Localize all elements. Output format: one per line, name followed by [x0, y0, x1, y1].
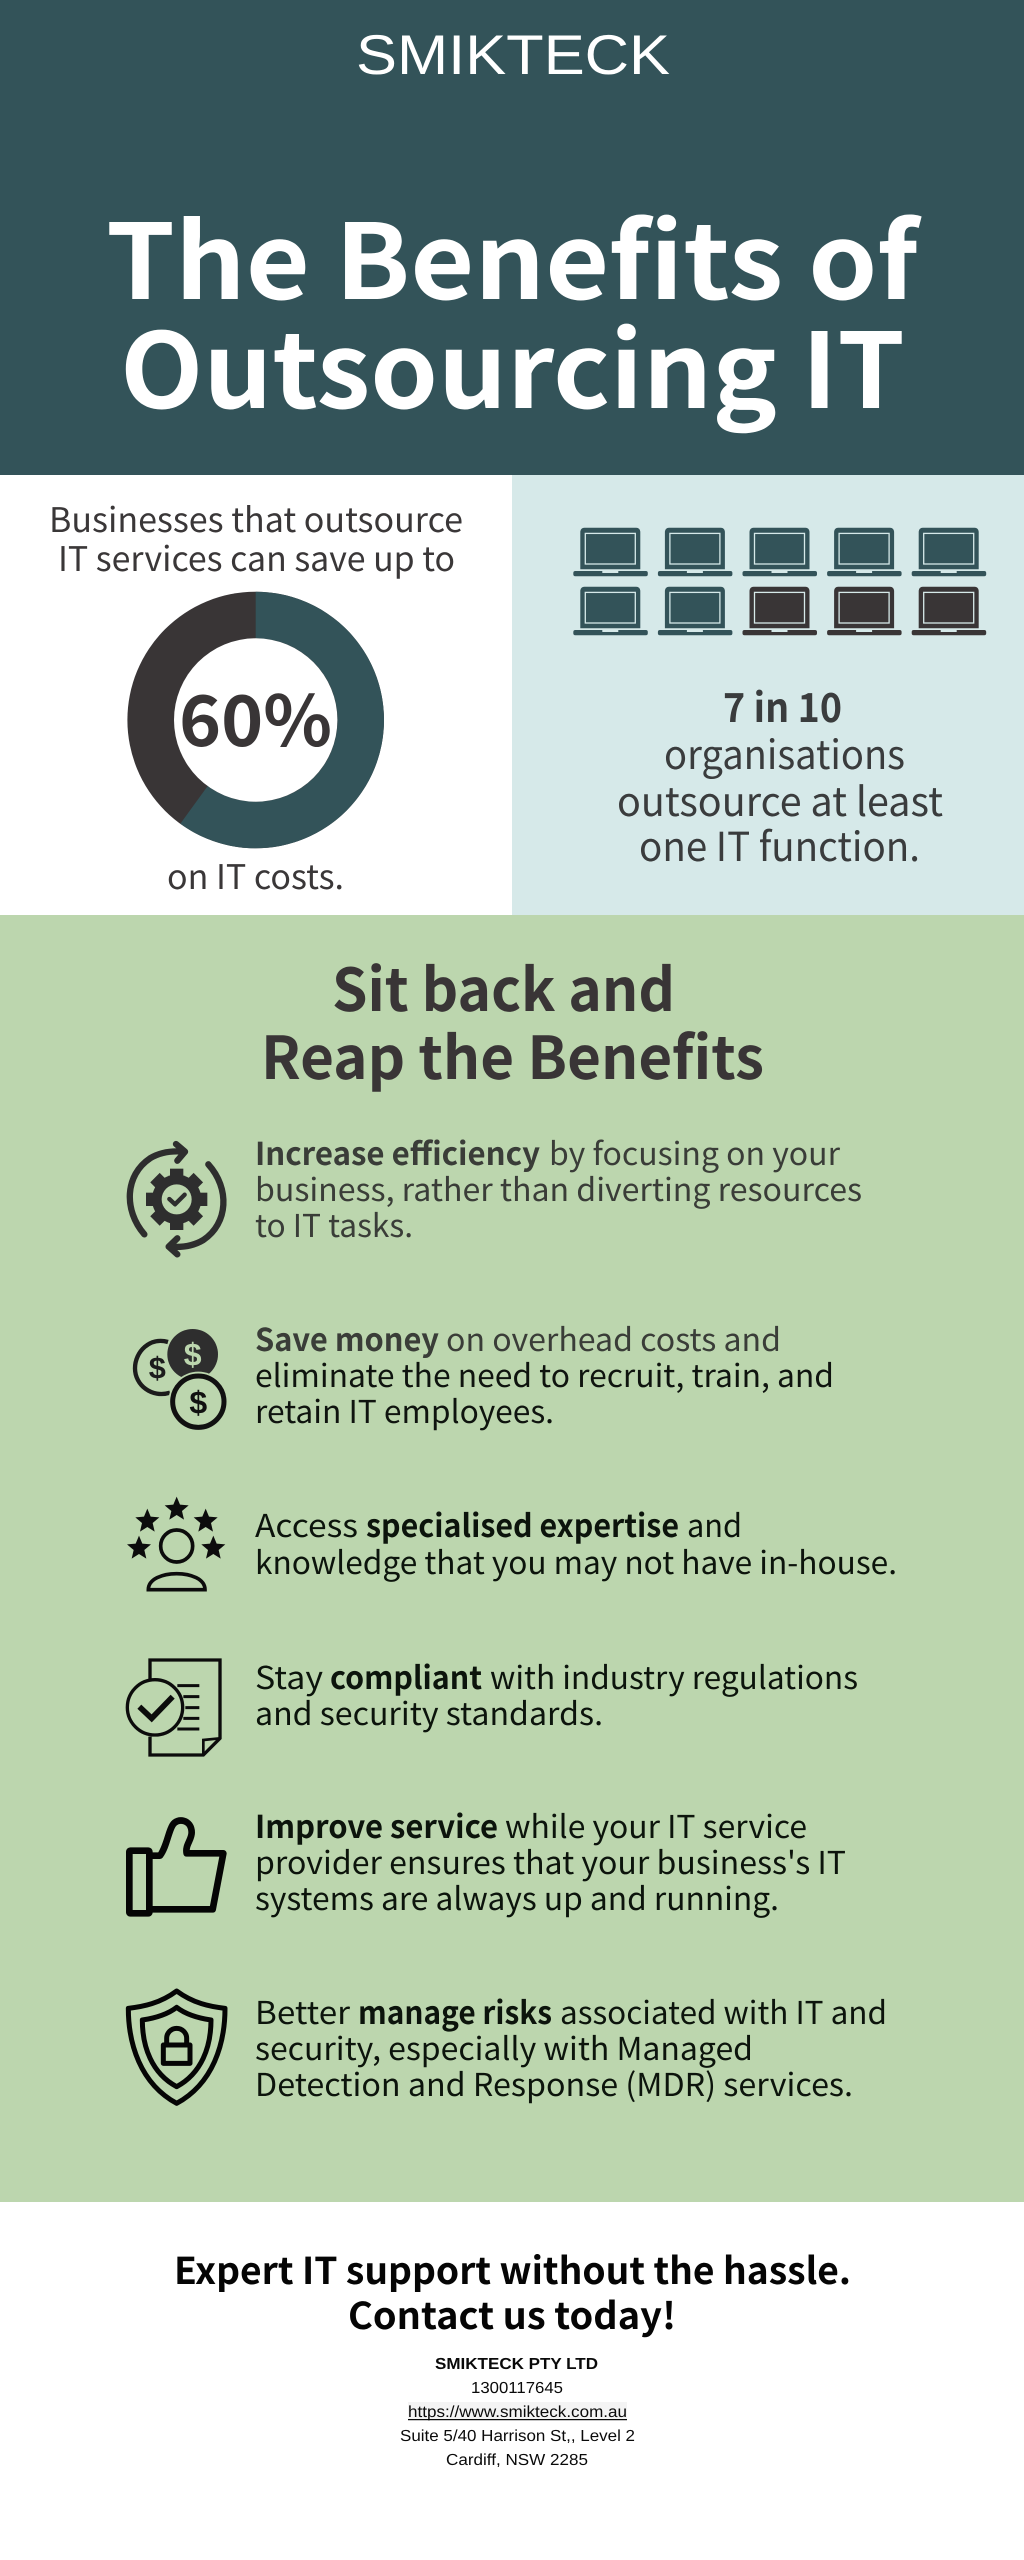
call to action: Contact us today!	[348, 2286, 676, 2340]
contact details: https://www.smikteck.com.au	[408, 2404, 627, 2421]
contact details: 1300117645	[471, 2380, 563, 2397]
text: improve service: provider ensures that your business's IT	[255, 1838, 846, 1884]
text: 7 in 10 organisations: organisations	[664, 723, 905, 781]
title	[106, 178, 923, 438]
text: increase efficiency: business, rather than diverting resources	[255, 1165, 862, 1211]
panel: benefits	[0, 915, 1024, 2202]
text: stay compliant: with industry regulations	[490, 1653, 858, 1699]
icon: coins	[135, 1329, 228, 1432]
contact details: SMIKTECK PTY LTD	[435, 2356, 598, 2373]
icon: coins: $	[149, 1351, 166, 1385]
text: increase efficiency: by focusing on your	[549, 1129, 841, 1175]
text: improve service: Improve service	[255, 1802, 498, 1848]
text: stay compliant: and security standards.	[255, 1689, 603, 1735]
text: savings outro: on IT costs.	[167, 850, 344, 899]
text: 7 in 10 organisations: 7 in 10	[723, 676, 842, 734]
text: 7 in 10 organisations: outsource at least	[617, 770, 943, 828]
icon: coins: $	[189, 1385, 207, 1420]
text: stay compliant: Stay	[255, 1653, 323, 1699]
text: increase efficiency: Increase efficiency	[255, 1129, 540, 1175]
icon array: laptops	[573, 528, 986, 635]
call to action	[174, 2241, 851, 2340]
panel: footer	[0, 2202, 1024, 2560]
text: improve service: systems are always up and running.	[255, 1874, 779, 1920]
text: manage risks: associated with IT and	[560, 1988, 887, 2034]
icon: security shield	[128, 1991, 225, 2103]
title: The Benefits of	[106, 178, 923, 329]
panel: header	[0, 0, 1024, 475]
text: stay compliant: compliant	[330, 1653, 482, 1699]
text: specialised expertise: and	[687, 1501, 742, 1547]
icon: thumbs up	[129, 1821, 223, 1913]
text: stay compliant	[255, 1653, 858, 1735]
donut chart: 60 percent	[127, 592, 384, 848]
panel: 7 in 10 stat	[512, 475, 1024, 915]
text: increase efficiency	[255, 1129, 862, 1247]
text: save money: eliminate the need to recruit, train, and	[255, 1351, 834, 1397]
text: specialised expertise: Access	[255, 1501, 358, 1547]
text: specialised expertise	[255, 1501, 897, 1584]
text: manage risks: Detection and Response (MDR) services.	[255, 2060, 853, 2106]
icon: person with stars	[127, 1497, 225, 1590]
heading: sit back and reap the benefits: Sit back and	[332, 943, 675, 1028]
text: save money	[255, 1315, 834, 1433]
donut value: 60%	[179, 666, 332, 767]
contact details	[400, 2356, 635, 2469]
contact details: Cardiff, NSW 2285	[446, 2452, 588, 2469]
text: specialised expertise: knowledge that you may not have in-house.	[255, 1538, 897, 1584]
heading: sit back and reap the benefits: Reap the Benefits	[261, 1011, 764, 1096]
text: savings intro: Businesses that outsource	[49, 493, 463, 542]
title: Outsourcing IT	[120, 287, 905, 438]
text: increase efficiency: to IT tasks.	[255, 1201, 413, 1247]
logo: SMIKTECK: SMIKTECK	[356, 23, 670, 86]
text: 7 in 10 organisations	[617, 676, 943, 873]
text: manage risks: manage risks	[358, 1988, 552, 2034]
text: improve service	[255, 1802, 846, 1920]
text: savings intro: IT services can save up to	[58, 532, 455, 581]
icon: coins: $	[184, 1337, 202, 1373]
icon: compliance document	[127, 1660, 220, 1755]
panel: 60% savings stat	[0, 475, 512, 915]
text: 7 in 10 organisations: one IT function.	[639, 815, 920, 873]
call to action: Expert IT support without the hassle.	[174, 2241, 851, 2295]
text: save money: Save money	[255, 1315, 439, 1361]
text: save money: on overhead costs and	[446, 1315, 781, 1361]
contact details: Suite 5/40 Harrison St,, Level 2	[400, 2428, 635, 2445]
icon: gear with cycle arrows	[130, 1144, 223, 1254]
heading: sit back and reap the benefits	[261, 943, 764, 1096]
text: manage risks	[255, 1988, 887, 2106]
text: manage risks: security, especially with Managed	[255, 2024, 753, 2070]
text: specialised expertise: specialised expertise	[366, 1501, 679, 1547]
text: improve service: while your IT service	[505, 1802, 807, 1848]
text: manage risks: Better	[255, 1988, 351, 2034]
text: save money: retain IT employees.	[255, 1387, 554, 1433]
text: savings intro	[49, 493, 463, 581]
